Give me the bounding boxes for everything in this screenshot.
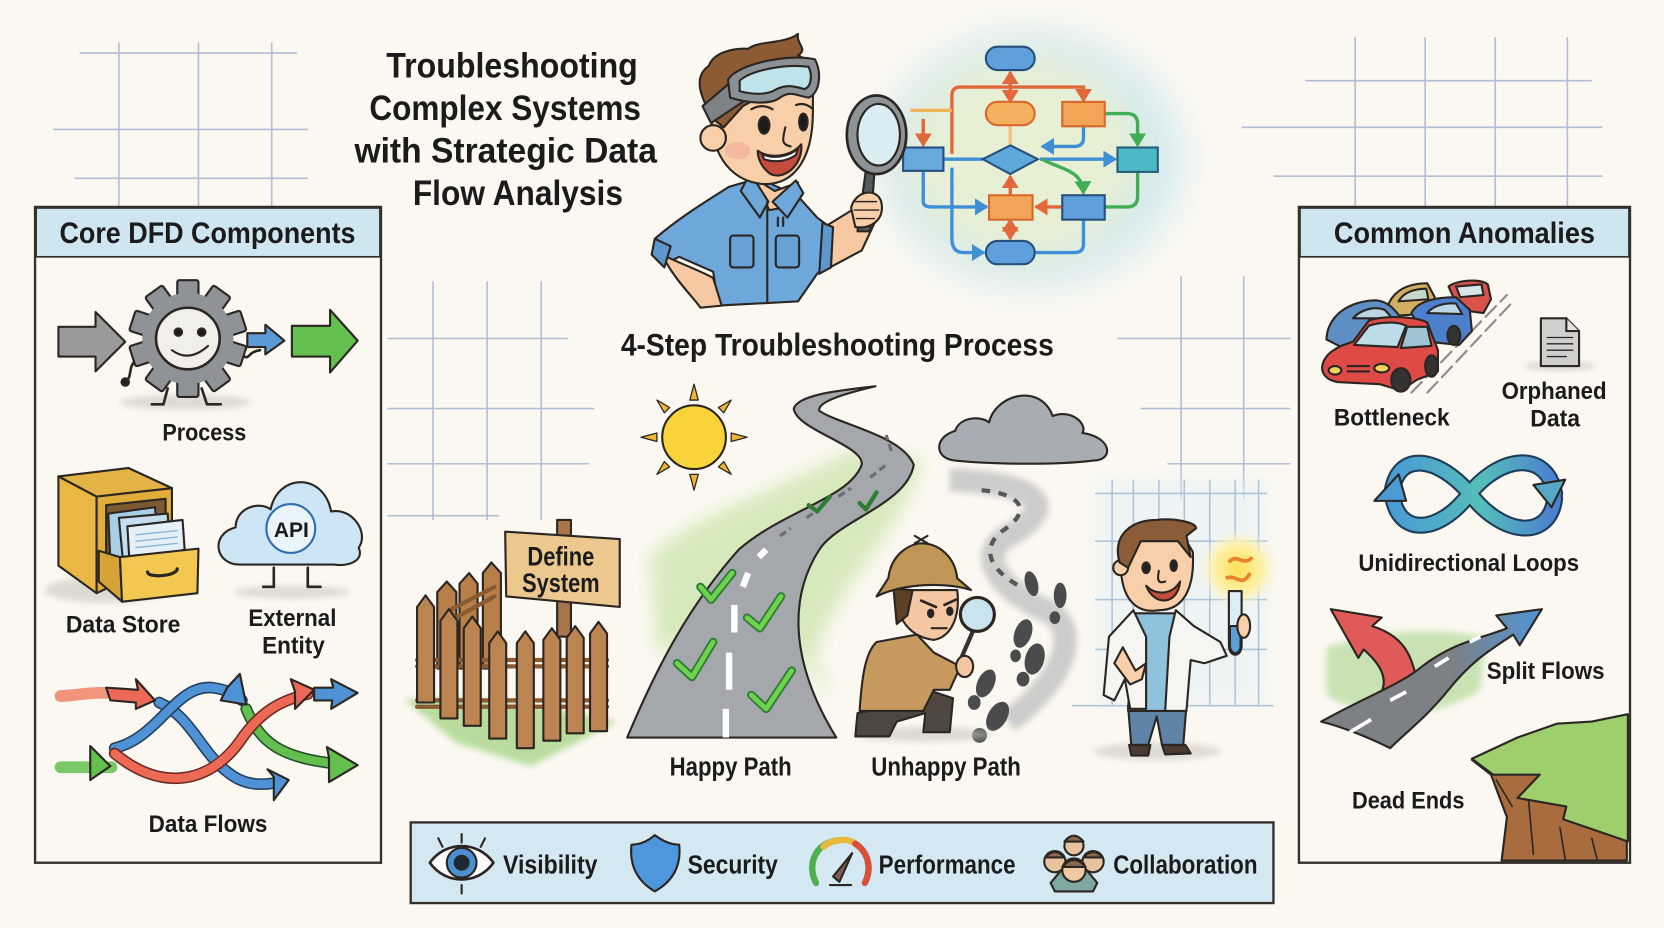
step 3: unhappy path cloud, trail and detective [854,396,1107,743]
label: orphaned data: Data [1530,406,1581,433]
label: split flows: Split Flows [1487,658,1605,685]
label: collaboration: Collaboration [1113,851,1258,879]
label: performance: Performance [879,851,1016,879]
dead ends icon: cliff [1472,714,1628,861]
title: Troubleshooting [386,46,638,85]
panel: core DFD components [35,207,381,863]
label: unhappy path: Unhappy Path [871,754,1021,782]
unidirectional loops icon: infinity arrows [1374,463,1565,528]
label: external entity: External [248,605,336,632]
label: happy path: Happy Path [670,754,792,782]
label: orphaned data [1502,378,1607,433]
label: unidirectional loops: Unidirectional Loops [1358,550,1579,577]
title [354,46,657,213]
heading: 4-step process: 4-Step Troubleshooting Process [621,326,1054,362]
panel: common anomalies [1299,207,1630,863]
detective [854,536,994,742]
split flows icon: forked road [1321,609,1542,748]
step 2: happy path sun and road [627,384,921,738]
footprints [968,570,1067,743]
label: process: Process [162,419,246,446]
label: data flows: Data Flows [149,811,267,838]
sign label [522,542,600,598]
orphaned data icon: document [1524,318,1596,370]
external entity icon: API cloud: API [274,519,309,542]
label: external entity: Entity [262,633,325,660]
label: visibility: Visibility [503,851,598,879]
title: Flow Analysis [413,174,623,213]
title: with Strategic Data [354,131,657,170]
step 1: define system fence and sign [405,520,620,766]
label: security: Security [688,851,779,879]
title: Complex Systems [369,89,641,128]
external entity icon: API cloud [219,482,362,599]
icon: sun [641,384,747,490]
road [627,386,914,738]
label: external entity [248,605,336,660]
step 4: scientist with test tube [1072,480,1279,760]
engineer with magnifying glass [652,34,906,308]
benefits bar [411,822,1273,903]
heading: core DFD components: Core DFD Components [59,217,356,250]
data flows icon: crossing arrows [61,674,358,800]
bottleneck icon: traffic jam [1322,281,1512,393]
flowchart with glow [883,34,1180,284]
heading: common anomalies: Common Anomalies [1334,217,1595,250]
sign label: Define [527,542,594,572]
label: dead ends: Dead Ends [1352,788,1464,815]
icon: team [1044,836,1104,891]
label: bottleneck: Bottleneck [1334,405,1450,432]
icon: storm cloud [939,396,1107,464]
sign label: System [522,568,600,598]
icon: eye [430,834,493,894]
icon: gauge [812,840,869,885]
data store icon: filing cabinet [45,468,198,603]
process icon: gear with arrows [58,280,358,410]
icon: shield [631,835,680,891]
label: data store: Data Store [66,611,180,638]
label: orphaned data: Orphaned [1502,378,1607,405]
